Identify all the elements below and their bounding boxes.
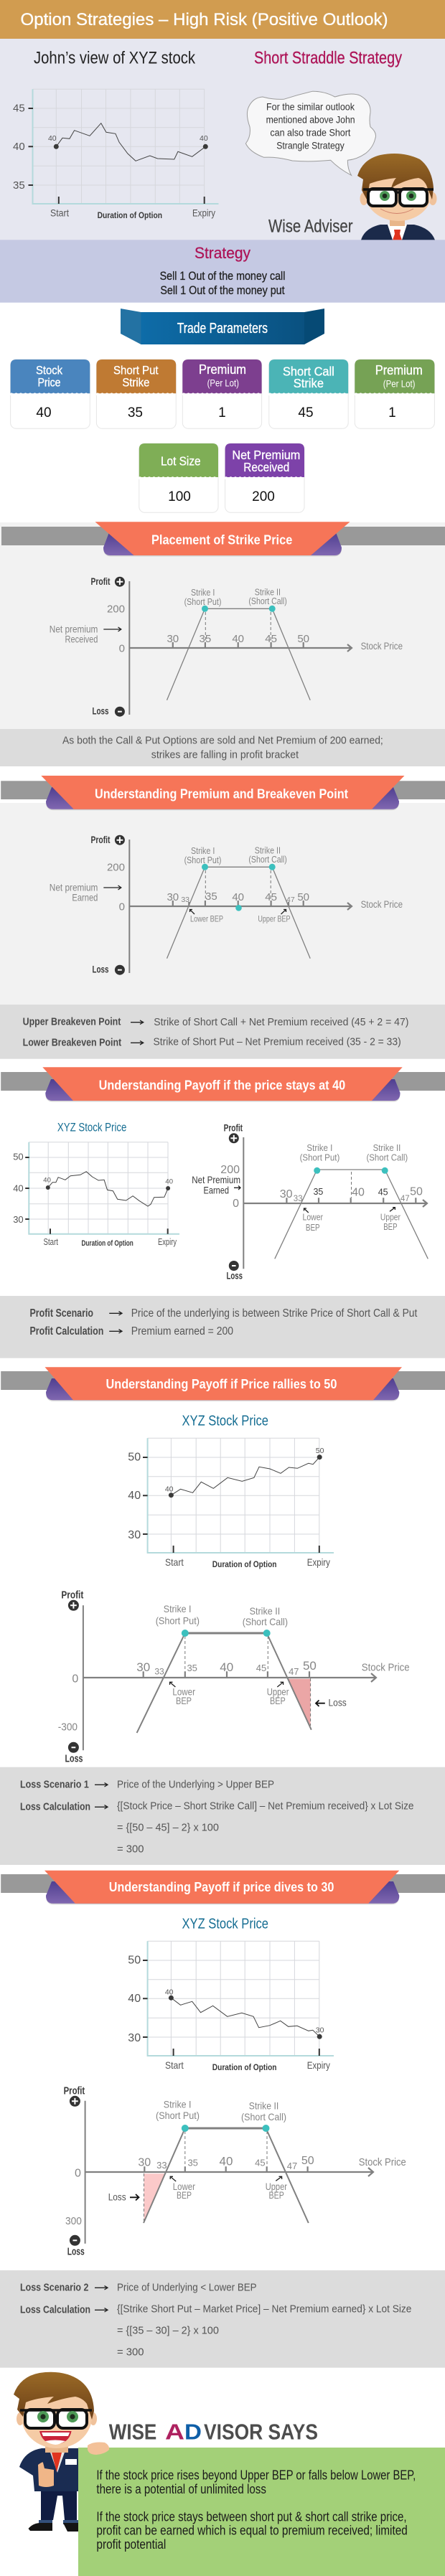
payoff chart: rally to 50 with loss area: BEP xyxy=(270,1696,286,1706)
card: Short Put Strike: Short Put xyxy=(113,364,159,377)
payoff chart: breakeven: (Short Put) xyxy=(184,855,221,865)
card: Premium per lot: 1 xyxy=(218,405,226,420)
line chart: XYZ stock price dives to 30: Start xyxy=(165,2059,184,2071)
heading: Short Straddle Strategy: Short Straddle Strategy xyxy=(254,48,402,67)
line chart: XYZ stock price rallies to 50: 40 xyxy=(128,1490,141,1502)
text block: profit scenario: Price of the underlying is between Strike Price of Short Call & Put xyxy=(131,1307,418,1320)
heading ribbon: Premium and Breakeven xyxy=(1,776,445,810)
line chart: XYZ stock price stays at 40: 40 xyxy=(13,1183,24,1193)
card: Short Put Strike: Strike xyxy=(122,376,149,390)
text block: profit scenario xyxy=(0,1296,445,1358)
line chart: John's view: 40 xyxy=(13,141,25,153)
payoff chart: dive to 30 with loss area: 47 xyxy=(287,2161,297,2171)
card: Net Premium Received: 200 xyxy=(252,489,275,504)
line chart: XYZ stock price stays at 40: 50 xyxy=(13,1152,24,1162)
text block: loss scenario 1: = 300 xyxy=(117,1843,144,1856)
payoff chart: dive to 30 with loss area: (Short Call) xyxy=(241,2111,286,2123)
payoff chart: price stays at 40: Strike I xyxy=(306,1142,332,1153)
payoff chart: breakeven: 30 xyxy=(167,891,179,903)
payoff chart: dive to 30 with loss area: 50 xyxy=(301,2155,314,2167)
text block: profit scenario: Profit Calculation xyxy=(30,1325,103,1338)
heading: Wise Advisor Says xyxy=(109,2419,318,2444)
payoff chart: rally to 50 with loss area: 50 xyxy=(303,1659,317,1673)
payoff chart: rally to 50 with loss area: BEP xyxy=(176,1696,192,1706)
payoff chart: dive to 30 with loss area: 35 xyxy=(187,2157,198,2168)
payoff chart: breakeven: 200 xyxy=(107,861,125,873)
text block: loss scenario 1: = {[50 – 45] – 2} x 100 xyxy=(117,1822,219,1834)
chart title: XYZ Stock Price xyxy=(182,1414,268,1429)
line chart: John's view: Duration of Option xyxy=(98,210,162,220)
payoff chart: rally to 50 with loss area: Strike I xyxy=(164,1603,191,1614)
line chart: XYZ stock price rallies to 50: Expiry xyxy=(307,1556,330,1568)
icon: hand on panel edge xyxy=(88,2443,109,2455)
card: Net Premium Received: Net Premium xyxy=(232,448,300,462)
payoff chart: price stays at 40: (Short Call) xyxy=(366,1152,408,1162)
payoff chart: rally to 50 with loss area: Loss xyxy=(65,1754,83,1765)
payoff chart: rally to 50 with loss area: 40 xyxy=(220,1660,233,1674)
text block: breakeven formulas: Lower Breakeven Point xyxy=(23,1037,121,1049)
heading ribbon: Payoff if price dives to 30 xyxy=(1,1871,445,1904)
payoff chart: dive to 30 with loss area: (Short Put) xyxy=(156,2110,200,2121)
text block: loss scenario 2: {[Strike Short Put – Market Price] – Net Premium earned} x Lot Size xyxy=(117,2303,411,2316)
header banner: Option Strategies – High Risk (Positive Outlook) xyxy=(20,10,388,29)
loss area xyxy=(289,1679,311,1727)
line chart: XYZ stock price dives to 30: 40 xyxy=(165,1988,174,1996)
text block: profit scenario: Premium earned = 200 xyxy=(131,1325,233,1338)
heading: Wise Advisor Says: D xyxy=(184,2419,202,2444)
payoff chart: strike placement: 35 xyxy=(200,633,211,645)
panel: green advice: there is a potential of unlimited loss xyxy=(96,2482,266,2496)
line chart: John's view: Expiry xyxy=(192,207,215,219)
payoff chart: strike placement: 0 xyxy=(119,643,125,655)
payoff chart: dive to 30 with loss area: 30 xyxy=(138,2156,151,2168)
payoff chart: rally to 50 with loss area: (Short Call) xyxy=(243,1616,288,1627)
panel: strategy: Sell 1 Out of the money call xyxy=(160,269,285,283)
card: Stock Price: Stock xyxy=(36,364,62,377)
line chart: John's view: Start xyxy=(50,207,69,219)
card: Premium per lot second: 1 xyxy=(388,405,396,420)
payoff chart: dive to 30 with loss area: 45 xyxy=(255,2157,266,2168)
card: Premium per lot xyxy=(182,359,262,428)
payoff chart: breakeven: 47 xyxy=(286,896,295,904)
line chart: XYZ stock price stays at 40: Duration of Option xyxy=(82,1239,134,1248)
card: Short Put Strike: 35 xyxy=(128,405,143,420)
payoff chart: rally to 50 with loss area: Upper xyxy=(267,1687,289,1698)
payoff chart: dive to 30 with loss area: Strike I xyxy=(164,2099,191,2110)
payoff chart: dive to 30 with loss area: Lower xyxy=(173,2181,195,2192)
payoff chart: breakeven: Profit xyxy=(90,834,111,845)
payoff chart: price stays at 40: Loss xyxy=(227,1271,243,1282)
panel: Understanding Premium and Breakeven Point xyxy=(0,776,445,1005)
line chart: XYZ stock price stays at 40 xyxy=(13,1122,179,1248)
heading: John's view: John’s view of XYZ stock xyxy=(34,48,196,67)
line chart: XYZ stock price dives to 30 xyxy=(128,1917,334,2072)
loss area xyxy=(144,2173,164,2222)
line chart: XYZ stock price rallies to 50: Duration of Option xyxy=(212,1559,277,1569)
text block: breakeven formulas xyxy=(0,1005,445,1059)
payoff chart: breakeven: 0 xyxy=(119,901,125,913)
payoff chart: dive to 30 with loss area: BEP xyxy=(177,2190,192,2201)
payoff chart: dive to 30 with loss area: 0 xyxy=(75,2168,81,2180)
callout: speech bubble: mentioned above John xyxy=(266,113,355,125)
card: Lot Size xyxy=(139,443,218,512)
payoff chart: breakeven: 33 xyxy=(181,896,189,904)
payoff chart: dive to 30 with loss area: BEP xyxy=(268,2190,284,2201)
callout: speech bubble: can also trade Short xyxy=(270,126,350,138)
payoff chart: strike placement: (Short Put) xyxy=(184,597,221,607)
payoff chart: price stays at 40: 200 xyxy=(220,1164,240,1176)
payoff chart: strike placement: 200 xyxy=(107,603,125,615)
text block: breakeven formulas: Strike of Short Call + Net Premium received (45 + 2 = 47) xyxy=(154,1016,408,1028)
card: Lot Size: Lot Size xyxy=(161,453,201,468)
payoff chart: dive to 30 with loss area: Upper xyxy=(266,2181,287,2192)
card: Stock Price xyxy=(11,359,90,428)
text block: loss scenario 2: Loss Scenario 2 xyxy=(20,2282,88,2294)
line chart: XYZ stock price dives to 30: 30 xyxy=(316,2026,324,2034)
payoff chart: price stays at 40: Upper xyxy=(380,1212,401,1223)
payoff chart: rally to 50 with loss area xyxy=(58,1590,410,1765)
payoff chart: strike placement: Strike II xyxy=(255,587,281,597)
payoff chart: strike placement: Loss xyxy=(92,705,109,717)
payoff chart: price stays at 40: 0 xyxy=(233,1198,239,1210)
text block: loss scenario 2: Loss Calculation xyxy=(20,2303,90,2316)
payoff chart: dive to 30 with loss area: 40 xyxy=(220,2154,233,2168)
card: Short Call Strike xyxy=(269,359,348,428)
payoff chart: price stays at 40: BEP xyxy=(383,1221,398,1232)
icon: wise adviser character xyxy=(357,154,436,240)
card: Net Premium Received: Received xyxy=(243,460,289,474)
heading ribbon: Placement of Strike Price xyxy=(1,522,445,557)
line chart: XYZ stock price rallies to 50: Start xyxy=(165,1556,184,1568)
panel: strategy: Sell 1 Out of the money put xyxy=(160,283,285,297)
line chart: XYZ stock price stays at 40: 30 xyxy=(13,1214,24,1225)
line chart: XYZ stock price dives to 30: Duration of Option xyxy=(212,2062,277,2072)
payoff chart: strike placement: Net premium xyxy=(50,624,98,635)
payoff chart: rally to 50 with loss area: Loss xyxy=(329,1697,347,1708)
line chart: XYZ stock price rallies to 50: 50 xyxy=(128,1452,141,1464)
payoff chart: rally to 50 with loss area: Stock Price xyxy=(362,1661,410,1673)
payoff chart: rally to 50 with loss area: 45 xyxy=(256,1663,266,1673)
payoff chart: strike placement: 50 xyxy=(297,633,309,645)
payoff chart: price stays at 40: 45 xyxy=(378,1188,388,1198)
payoff chart: breakeven: Strike II xyxy=(255,845,281,855)
payoff chart: strike placement: Received xyxy=(65,634,98,645)
text block: loss scenario 1: {[Stock Price – Short Strike Call] – Net Premium received} x Lot Size xyxy=(117,1800,413,1813)
line chart: XYZ stock price dives to 30: 50 xyxy=(128,1955,141,1967)
panel: green advice: profit potential xyxy=(96,2537,166,2552)
heading: Wise Advisor Says: WISE xyxy=(109,2419,156,2444)
card: Short Call Strike: Strike xyxy=(294,376,324,390)
payoff chart: price stays at 40: 35 xyxy=(313,1187,323,1197)
payoff chart: breakeven: Stock Price xyxy=(361,898,403,910)
payoff chart: dive to 30 with loss area: 300 xyxy=(65,2215,82,2227)
payoff chart: rally to 50 with loss area: 30 xyxy=(136,1660,150,1674)
payoff chart: rally to 50 with loss area: 47 xyxy=(289,1666,299,1677)
panel: strategy: Strategy xyxy=(195,244,250,262)
payoff chart: price stays at 40: Net Premium xyxy=(192,1174,240,1185)
payoff chart: price stays at 40: 30 xyxy=(280,1188,293,1200)
card: Net Premium Received xyxy=(225,443,304,512)
text block: loss scenario 2: = {[35 – 30] – 2} x 100 xyxy=(117,2325,219,2337)
card: Short Call Strike: 45 xyxy=(298,405,314,420)
card: Stock Price: Price xyxy=(37,376,60,390)
line chart: XYZ stock price dives to 30: 40 xyxy=(128,1993,141,2005)
payoff chart: price stays at 40 xyxy=(192,1123,428,1282)
payoff chart: rally to 50 with loss area: Strike II xyxy=(250,1605,280,1617)
line chart: John's view: 35 xyxy=(13,179,25,192)
payoff chart: dive to 30 with loss area: Loss xyxy=(67,2247,85,2258)
text block: loss scenario 1 xyxy=(0,1767,445,1865)
line chart: John's view: 40 xyxy=(48,134,57,143)
payoff chart: strike placement: (Short Call) xyxy=(248,596,287,606)
payoff chart: dive to 30 with loss area: Strike II xyxy=(249,2100,278,2112)
card: Lot Size: 100 xyxy=(168,489,191,504)
line chart: John's view: 40 xyxy=(200,134,208,143)
payoff chart: price stays at 40: Earned xyxy=(204,1184,229,1195)
heading ribbon: Payoff if price rallies to 50: Understanding Payoff if Price rallies to 50 xyxy=(106,1377,337,1391)
payoff chart: price stays at 40: (Short Put) xyxy=(300,1152,339,1162)
line chart: XYZ stock price dives to 30: Expiry xyxy=(307,2059,330,2071)
line chart: XYZ stock price rallies to 50 xyxy=(128,1414,334,1569)
payoff chart: strike placement: Profit xyxy=(90,575,111,587)
callout: speech bubble: For the similar outlook xyxy=(266,100,355,112)
payoff chart: strike placement xyxy=(50,575,403,717)
text block: breakeven formulas: Strike of Short Put – Net Premium received (35 - 2 = 33) xyxy=(154,1036,401,1048)
card: Stock Price: 40 xyxy=(36,405,52,420)
payoff chart: strike placement: 30 xyxy=(167,633,179,645)
heading: Wise Advisor Says: VISOR SAYS xyxy=(204,2419,318,2444)
payoff chart: strike placement: Strike I xyxy=(191,588,215,598)
heading ribbon: Payoff if price stays at 40 xyxy=(1,1067,445,1102)
payoff chart: breakeven: Loss xyxy=(92,964,109,975)
heading ribbon: Payoff if price rallies to 50 xyxy=(1,1367,445,1401)
card: Premium per lot: Premium xyxy=(199,362,246,377)
heading: Wise Advisor Says: A xyxy=(165,2419,184,2444)
text block: placement note: As both the Call & Put Options are sold and Net Premium of 200 earned; xyxy=(62,735,383,747)
heading ribbon: Payoff if price stays at 40: Understanding Payoff if the price stays at 40 xyxy=(99,1078,345,1092)
payoff chart: dive to 30 with loss area: Stock Price xyxy=(359,2156,406,2168)
panel: John's view and strategy intro xyxy=(0,39,445,240)
icon: smiling adviser figure xyxy=(14,2372,97,2532)
payoff chart: price stays at 40: Profit xyxy=(224,1123,243,1134)
payoff chart: breakeven: 35 xyxy=(205,890,217,903)
card: Short Call Strike: Short Call xyxy=(283,364,334,378)
payoff chart: breakeven: Strike I xyxy=(191,846,215,856)
text block: profit scenario: Profit Scenario xyxy=(30,1307,93,1320)
text block: loss scenario 1: Loss Calculation xyxy=(20,1800,90,1813)
line chart: XYZ stock price stays at 40: 40 xyxy=(43,1177,51,1185)
line chart: John's view: 45 xyxy=(13,102,25,115)
card: Premium per lot second xyxy=(355,359,434,428)
callout: speech bubble: Strangle Strategy xyxy=(276,139,345,151)
payoff chart: breakeven: Earned xyxy=(72,892,98,903)
card: Premium per lot second: (Per Lot) xyxy=(383,378,415,389)
payoff chart: breakeven: 50 xyxy=(297,891,309,903)
line chart: XYZ stock price dives to 30: 30 xyxy=(128,2032,141,2044)
payoff chart: breakeven: Lower BEP xyxy=(190,914,223,924)
payoff chart: price stays at 40: 47 xyxy=(400,1195,410,1203)
card: Short Put Strike xyxy=(96,359,176,428)
header banner xyxy=(0,0,445,39)
text block: loss scenario 1: Price of the Underlying > Upper BEP xyxy=(117,1779,274,1791)
text block: loss scenario 2: Price of Underlying < Lower BEP xyxy=(117,2282,257,2294)
line chart: XYZ stock price rallies to 50: 30 xyxy=(128,1529,141,1541)
payoff chart: price stays at 40: 50 xyxy=(410,1186,423,1198)
line chart: John's view xyxy=(13,89,218,220)
payoff chart: rally to 50 with loss area: 35 xyxy=(187,1663,197,1673)
chart title: XYZ Stock Price xyxy=(57,1122,126,1134)
heading: Trade Parameters ribbon xyxy=(121,309,324,344)
payoff chart: rally to 50 with loss area: Profit xyxy=(61,1590,83,1602)
payoff chart: price stays at 40: 33 xyxy=(294,1195,303,1203)
text block: placement note xyxy=(0,729,445,766)
payoff chart: rally to 50 with loss area: 0 xyxy=(72,1673,78,1685)
text block: breakeven formulas: Upper Breakeven Point xyxy=(23,1015,121,1028)
heading ribbon: Placement of Strike Price: Placement of Strike Price xyxy=(151,532,292,547)
payoff chart: price stays at 40: Lower xyxy=(303,1212,324,1223)
payoff chart: breakeven: Net premium xyxy=(50,882,98,893)
payoff chart: breakeven: Upper BEP xyxy=(258,914,290,924)
card: Premium per lot: (Per Lot) xyxy=(207,377,239,388)
heading ribbon: Payoff if price dives to 30: Understanding Payoff if price dives to 30 xyxy=(109,1880,334,1894)
line chart: XYZ stock price stays at 40: Start xyxy=(43,1237,58,1247)
payoff chart: dive to 30 with loss area: Loss xyxy=(108,2191,126,2203)
callout: speech bubble xyxy=(245,91,376,175)
payoff chart: breakeven xyxy=(50,834,403,975)
text block: loss scenario 2 xyxy=(0,2270,445,2368)
payoff chart: price stays at 40: 40 xyxy=(352,1187,365,1199)
payoff chart: price stays at 40: BEP xyxy=(306,1222,320,1233)
payoff chart: strike placement: 45 xyxy=(265,633,277,645)
text block: loss scenario 2: = 300 xyxy=(117,2346,144,2359)
payoff chart: rally to 50 with loss area: -300 xyxy=(58,1721,78,1734)
line chart: XYZ stock price stays at 40: 40 xyxy=(165,1178,173,1186)
payoff chart: dive to 30 with loss area: 33 xyxy=(156,2160,167,2171)
payoff chart: price stays at 40: Strike II xyxy=(373,1142,400,1153)
payoff chart: strike placement: 40 xyxy=(232,633,244,645)
line chart: XYZ stock price rallies to 50: 40 xyxy=(165,1485,174,1494)
label: Wise Adviser: Wise Adviser xyxy=(268,216,353,236)
payoff chart: strike placement: Stock Price xyxy=(361,640,403,652)
payoff chart: breakeven: 40 xyxy=(232,891,244,903)
payoff chart: breakeven: 45 xyxy=(265,891,277,903)
payoff chart: rally to 50 with loss area: Lower xyxy=(172,1687,195,1698)
panel: green advice xyxy=(78,2443,445,2576)
chart title: XYZ Stock Price xyxy=(182,1917,268,1932)
payoff chart: dive to 30 with loss area: Profit xyxy=(64,2086,85,2097)
panel: strategy xyxy=(0,240,445,303)
payoff chart: rally to 50 with loss area: (Short Put) xyxy=(156,1614,200,1626)
payoff chart: dive to 30 with loss area xyxy=(64,2086,406,2258)
text block: loss scenario 1: Loss Scenario 1 xyxy=(20,1779,89,1791)
heading: Trade Parameters ribbon: Trade Parameters xyxy=(177,321,268,337)
text block: placement note: strikes are falling in profit bracket xyxy=(151,749,299,761)
card: Premium per lot second: Premium xyxy=(375,363,423,377)
heading ribbon: Premium and Breakeven: Understanding Premium and Breakeven Point xyxy=(95,786,348,801)
panel: Placement of Strike Price xyxy=(0,522,445,729)
line chart: XYZ stock price rallies to 50: 50 xyxy=(316,1447,324,1455)
payoff chart: breakeven: (Short Call) xyxy=(248,855,287,865)
payoff chart: rally to 50 with loss area: 33 xyxy=(154,1666,164,1676)
line chart: XYZ stock price stays at 40: Expiry xyxy=(158,1237,177,1247)
